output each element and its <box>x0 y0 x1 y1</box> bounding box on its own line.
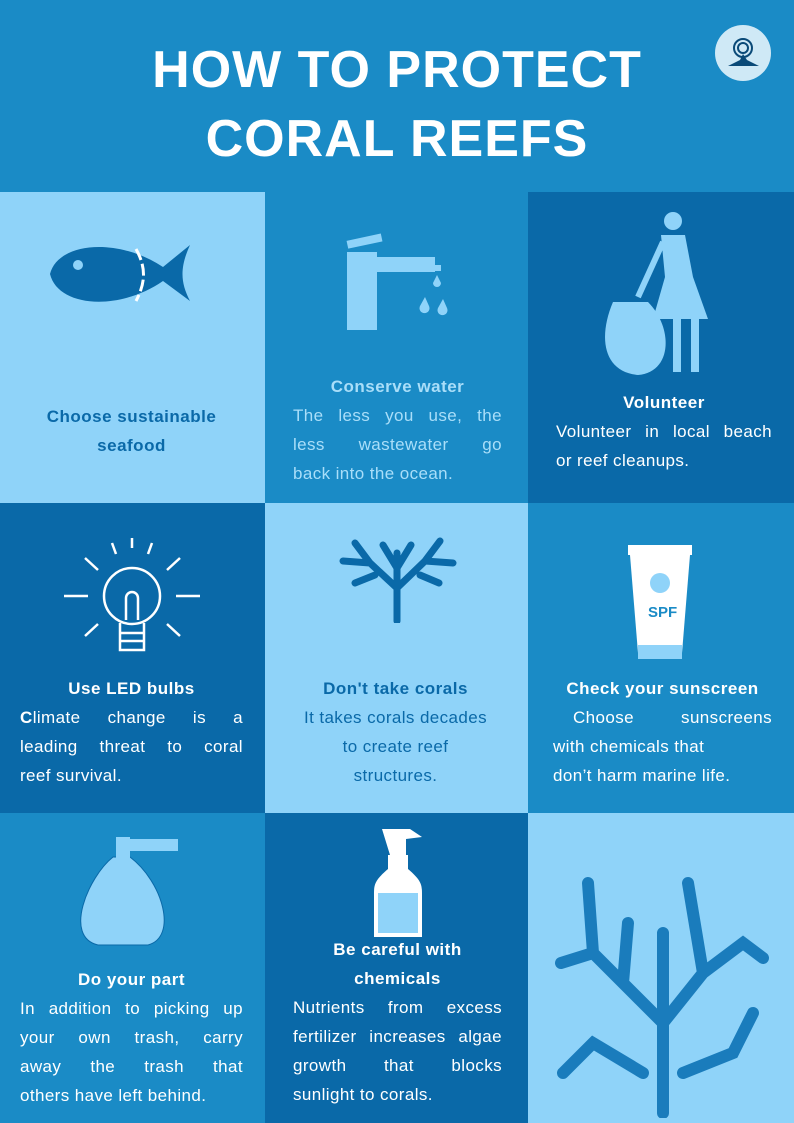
text: In addition to picking up <box>20 999 243 1018</box>
icon: spray bottle <box>374 829 422 937</box>
panel: do your part <box>0 813 265 1123</box>
panel: coral illustration <box>528 813 794 1123</box>
text: It takes corals decades <box>304 708 487 727</box>
text <box>553 679 772 785</box>
icon: tap <box>346 234 448 330</box>
icon: bulb <box>64 538 200 652</box>
icon: fish <box>50 245 190 302</box>
text: The less you use, the <box>293 406 502 425</box>
text: Nutrients from excess <box>293 998 502 1017</box>
text: Volunteer <box>623 393 705 412</box>
text <box>293 940 502 1104</box>
panel: volunteer <box>528 192 794 503</box>
text: Choose sustainable <box>47 407 216 426</box>
text: Do your part <box>78 970 185 989</box>
text: Climate change is a <box>20 708 243 727</box>
panel: seafood <box>0 192 265 503</box>
text: leading threat to coral <box>20 737 243 756</box>
title: HOW TO PROTECT <box>152 41 642 99</box>
text: Don't take corals <box>323 679 468 698</box>
icon: logo <box>715 25 771 81</box>
icon: large coral <box>555 877 769 1118</box>
title: CORAL REEFS <box>206 110 588 168</box>
text: with chemicals that <box>553 737 704 756</box>
text: to create reef <box>343 737 448 756</box>
icon: sunscreen tube <box>628 545 692 659</box>
text <box>556 393 772 470</box>
text <box>304 679 487 785</box>
panel: corals <box>265 503 528 813</box>
text: reef survival. <box>20 766 122 785</box>
text <box>47 407 216 455</box>
text: Check your sunscreen <box>566 679 759 698</box>
text <box>20 970 243 1105</box>
text: others have left behind. <box>20 1086 206 1105</box>
title <box>152 41 642 168</box>
text: Use LED bulbs <box>68 679 195 698</box>
header <box>0 0 794 192</box>
panel: sunscreen <box>528 503 794 813</box>
icon: trash bag <box>80 837 178 946</box>
icon: volunteer with bag <box>605 212 708 375</box>
text: less wastewater go <box>293 435 502 454</box>
text: Conserve water <box>331 377 464 396</box>
text <box>293 377 502 483</box>
text: Choose sunscreens <box>573 708 772 727</box>
text: sunlight to corals. <box>293 1085 433 1104</box>
text: don’t harm marine life. <box>553 766 730 785</box>
text: away the trash that <box>20 1057 243 1076</box>
text: Volunteer in local beach <box>556 422 772 441</box>
panel: chemicals <box>265 813 528 1123</box>
panel: conserve water <box>265 192 528 503</box>
icon: coral <box>340 538 456 623</box>
text: back into the ocean. <box>293 464 453 483</box>
text: fertilizer increases algae <box>293 1027 502 1046</box>
icon: sunscreen tube: SPF <box>648 604 677 621</box>
text: or reef cleanups. <box>556 451 689 470</box>
text: growth that blocks <box>293 1056 502 1075</box>
text: structures. <box>354 766 437 785</box>
text: chemicals <box>354 969 441 988</box>
text <box>20 679 243 785</box>
text: Be careful with <box>333 940 462 959</box>
panel: LED <box>0 503 265 813</box>
text: your own trash, carry <box>20 1028 243 1047</box>
text: seafood <box>97 436 166 455</box>
